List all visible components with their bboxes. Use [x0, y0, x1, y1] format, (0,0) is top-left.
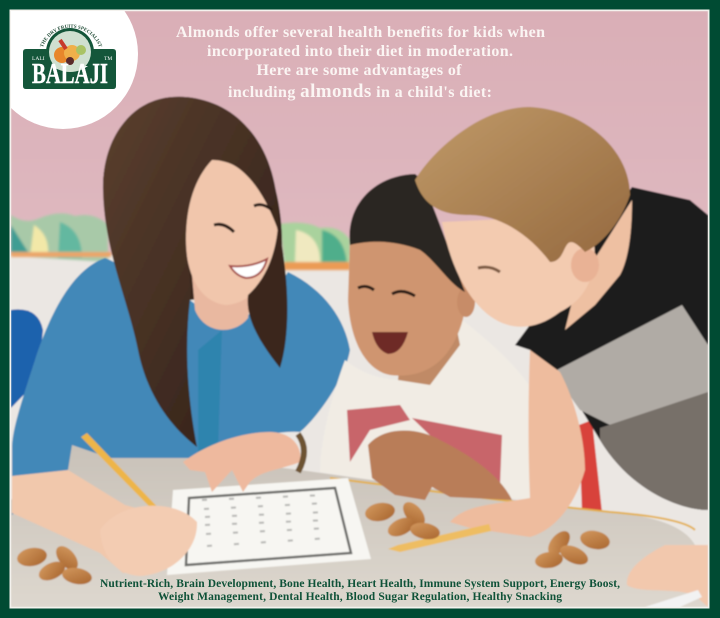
tagline: THE DRY FRUITS SPECIALIST [40, 24, 102, 47]
pencil [80, 432, 156, 507]
logo badge [11, 11, 138, 129]
dark hair [349, 174, 465, 292]
ear [571, 248, 599, 282]
worksheet paper [167, 478, 371, 575]
benefits list: Weight Management, Dental Health, Blood Sugar Regulation, Healthy Snacking [158, 591, 562, 603]
arm and clasped hands [368, 430, 512, 500]
benefits list: Nutrient-Rich, Brain Development, Bone Health, Heart Health, Immune System Support, Energy Boost, [100, 578, 620, 590]
blue shirt [12, 258, 350, 515]
yellow pencil on table [388, 524, 491, 552]
almonds right group [534, 527, 612, 570]
arm [450, 350, 585, 537]
benefits list [100, 578, 620, 603]
table edge [330, 478, 695, 530]
intro text: Almonds offer several health benefits for kids when [176, 24, 545, 41]
red stripe right [412, 418, 502, 485]
green sign [23, 49, 116, 89]
neck [565, 200, 632, 330]
red chair leg [579, 420, 602, 512]
writing arm [11, 468, 134, 573]
intro text: incorporated into their diet in moderation. [207, 43, 513, 60]
blue chair [11, 309, 43, 408]
bulletin border decoration [11, 213, 350, 270]
lali label: LALI [32, 56, 45, 62]
neck [397, 334, 461, 386]
fruit arch [46, 28, 94, 66]
neck [192, 275, 252, 330]
gray band [553, 305, 708, 425]
shirt [515, 187, 708, 510]
shirt placket [198, 330, 222, 452]
blond hair [415, 107, 630, 262]
worksheet number rows [202, 495, 330, 546]
woman's resting hand [183, 432, 300, 492]
face [185, 160, 278, 305]
background wall [11, 11, 708, 256]
arch sky [49, 31, 91, 73]
right hand [627, 545, 708, 607]
marker at table corner [645, 590, 702, 607]
front hair right [248, 225, 287, 368]
white circle [0, 0, 138, 129]
trademark label: TM [104, 56, 112, 62]
red stripe left [347, 405, 410, 462]
ear [457, 287, 475, 317]
boy two [415, 107, 708, 607]
face [442, 215, 595, 327]
hair back [103, 97, 282, 300]
intro text: including almonds in a child's diet: [228, 81, 492, 102]
white shirt [336, 359, 348, 386]
eye [478, 267, 500, 272]
classroom floor [11, 255, 708, 555]
face [348, 240, 466, 376]
almonds left group [16, 542, 93, 586]
eyes [358, 286, 415, 296]
woman [12, 97, 350, 573]
worksheet inner border [186, 488, 351, 565]
table [11, 442, 708, 607]
brand name: BALAJI [32, 58, 108, 90]
woman's writing hand [126, 504, 198, 576]
almonds middle group [364, 498, 441, 541]
eyes [214, 205, 272, 232]
fruit illustration [54, 40, 86, 65]
front hair left [103, 97, 278, 447]
bracelet [298, 434, 304, 472]
open mouth [372, 332, 408, 354]
gray bottom band [600, 392, 708, 510]
intro text [176, 24, 545, 102]
intro text: Here are some advantages of [256, 62, 462, 79]
boy one [336, 173, 512, 501]
smile [230, 259, 267, 278]
